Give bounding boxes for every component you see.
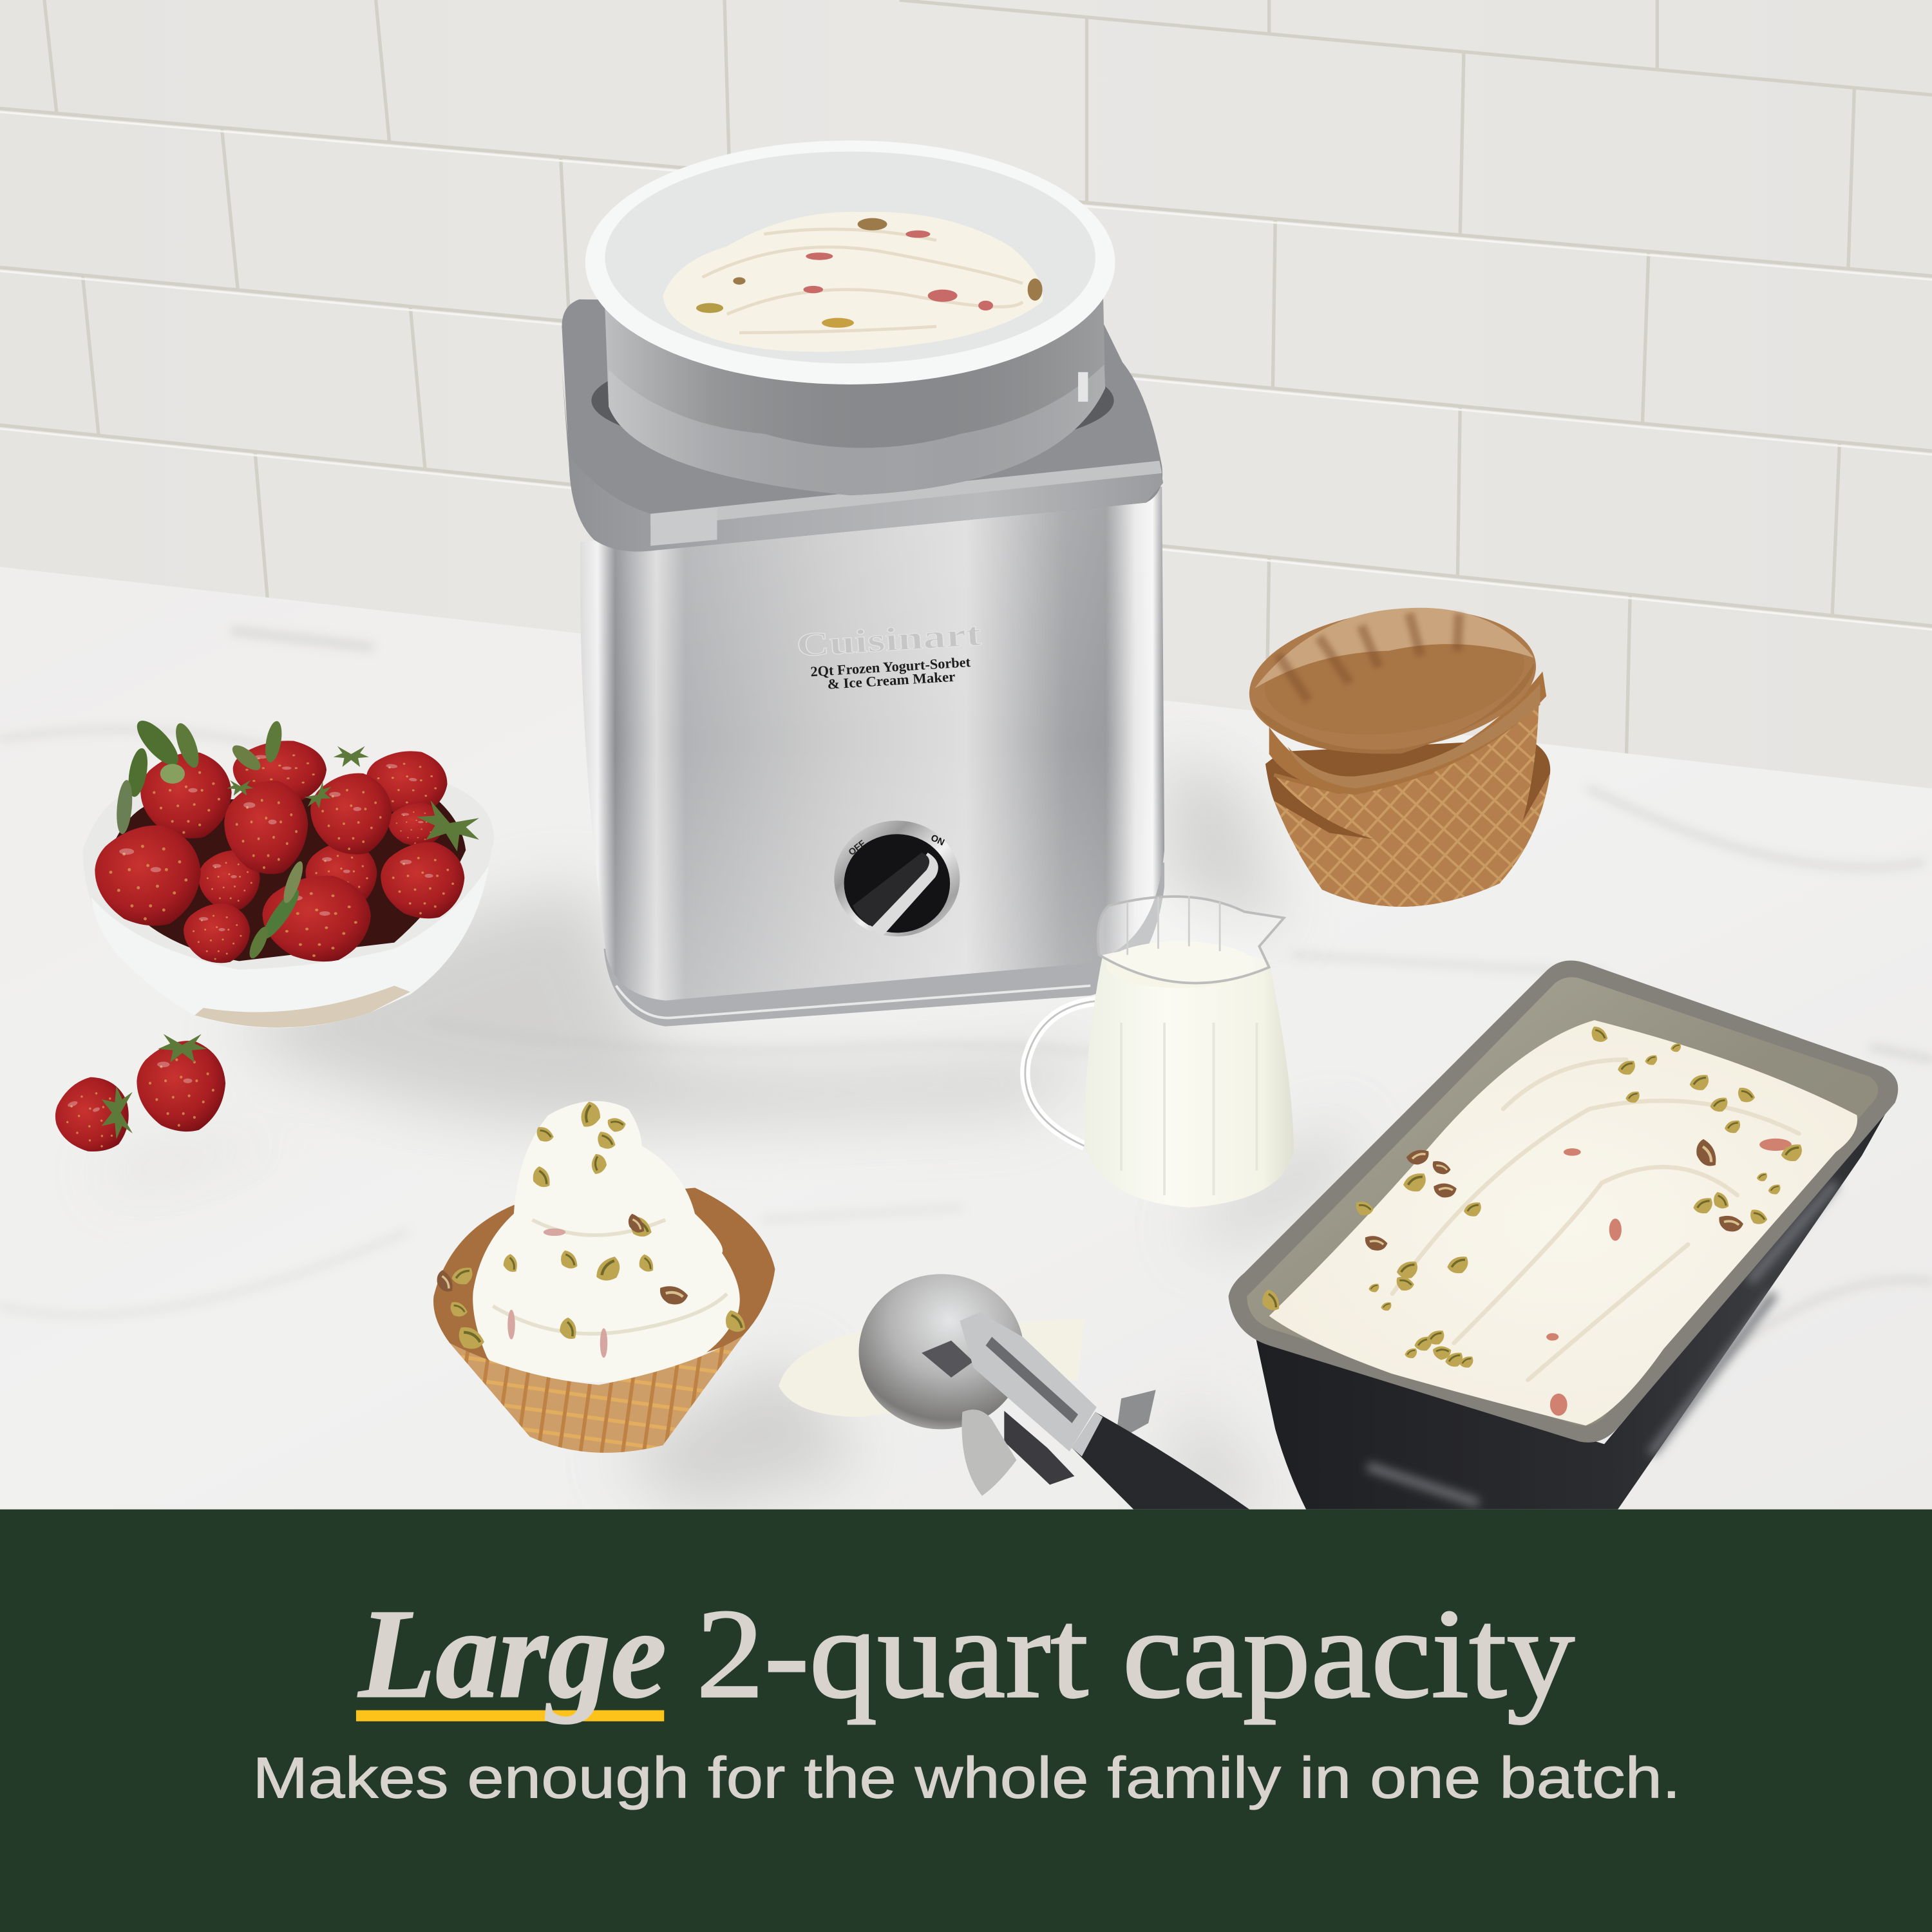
nut toppings [435, 1100, 746, 1354]
white bowl rim [585, 140, 1115, 384]
top bowl interior [1241, 592, 1545, 771]
soft shadows on counter [99, 752, 1343, 1510]
ice cream in pan [1269, 1020, 1857, 1426]
pistachio toppings [1262, 1023, 1802, 1368]
background: white subway tile wall [0, 0, 1932, 813]
strawberry leaves [115, 714, 486, 961]
pitcher handle [1025, 1001, 1103, 1146]
bottom green band [0, 1510, 1932, 1932]
glass rim [1098, 896, 1284, 983]
waffle bowl front [450, 1336, 743, 1453]
brand and product label [795, 616, 984, 694]
churned ice cream in bowl [663, 212, 1043, 352]
loose strawberries [45, 1034, 225, 1163]
waffle bowl interior [433, 1188, 775, 1381]
control knob: OFF [847, 838, 867, 858]
yellow underline [356, 1710, 664, 1721]
middle bowl [1274, 697, 1539, 845]
pan rim [1229, 960, 1898, 1443]
headline [357, 1584, 1575, 1725]
ice cream scoops [473, 1101, 740, 1383]
pan dark outer side [1256, 1097, 1895, 1510]
white ceramic bowl back and inside [82, 782, 494, 1028]
melted ice cream puddle [779, 1318, 1084, 1417]
ice cream scoop utensil [859, 1274, 1249, 1510]
brand and product label: 2Qt Frozen Yogurt-Sorbet [810, 654, 971, 679]
stack of waffle bowls [1241, 592, 1550, 907]
bowl front wall [91, 865, 489, 1028]
waffle bowl sundae [433, 1100, 775, 1453]
headline: Large [357, 1584, 667, 1725]
marble counter top [0, 567, 1932, 1515]
brand and product label: & Ice Cream Maker [827, 668, 956, 692]
subheading: Makes enough for the whole family in one batch. [252, 1746, 1681, 1810]
control knob [834, 820, 960, 936]
loaf pan with ice cream [1229, 960, 1898, 1510]
freezer bowl [604, 277, 1105, 495]
lid tray [562, 299, 1163, 551]
bowl of strawberries [82, 714, 494, 1028]
strawberries in bowl [95, 741, 464, 963]
control knob: ON [929, 833, 946, 848]
machine body: brushed steel housing [580, 487, 1164, 1027]
glass pitcher of milk [1025, 896, 1294, 1208]
headline: 2-quart capacity [696, 1584, 1575, 1725]
milk [1084, 947, 1294, 1208]
ice cream maker [562, 140, 1164, 1027]
brand and product label: Cuisinart [795, 616, 982, 664]
bottom bowl [1265, 739, 1550, 907]
